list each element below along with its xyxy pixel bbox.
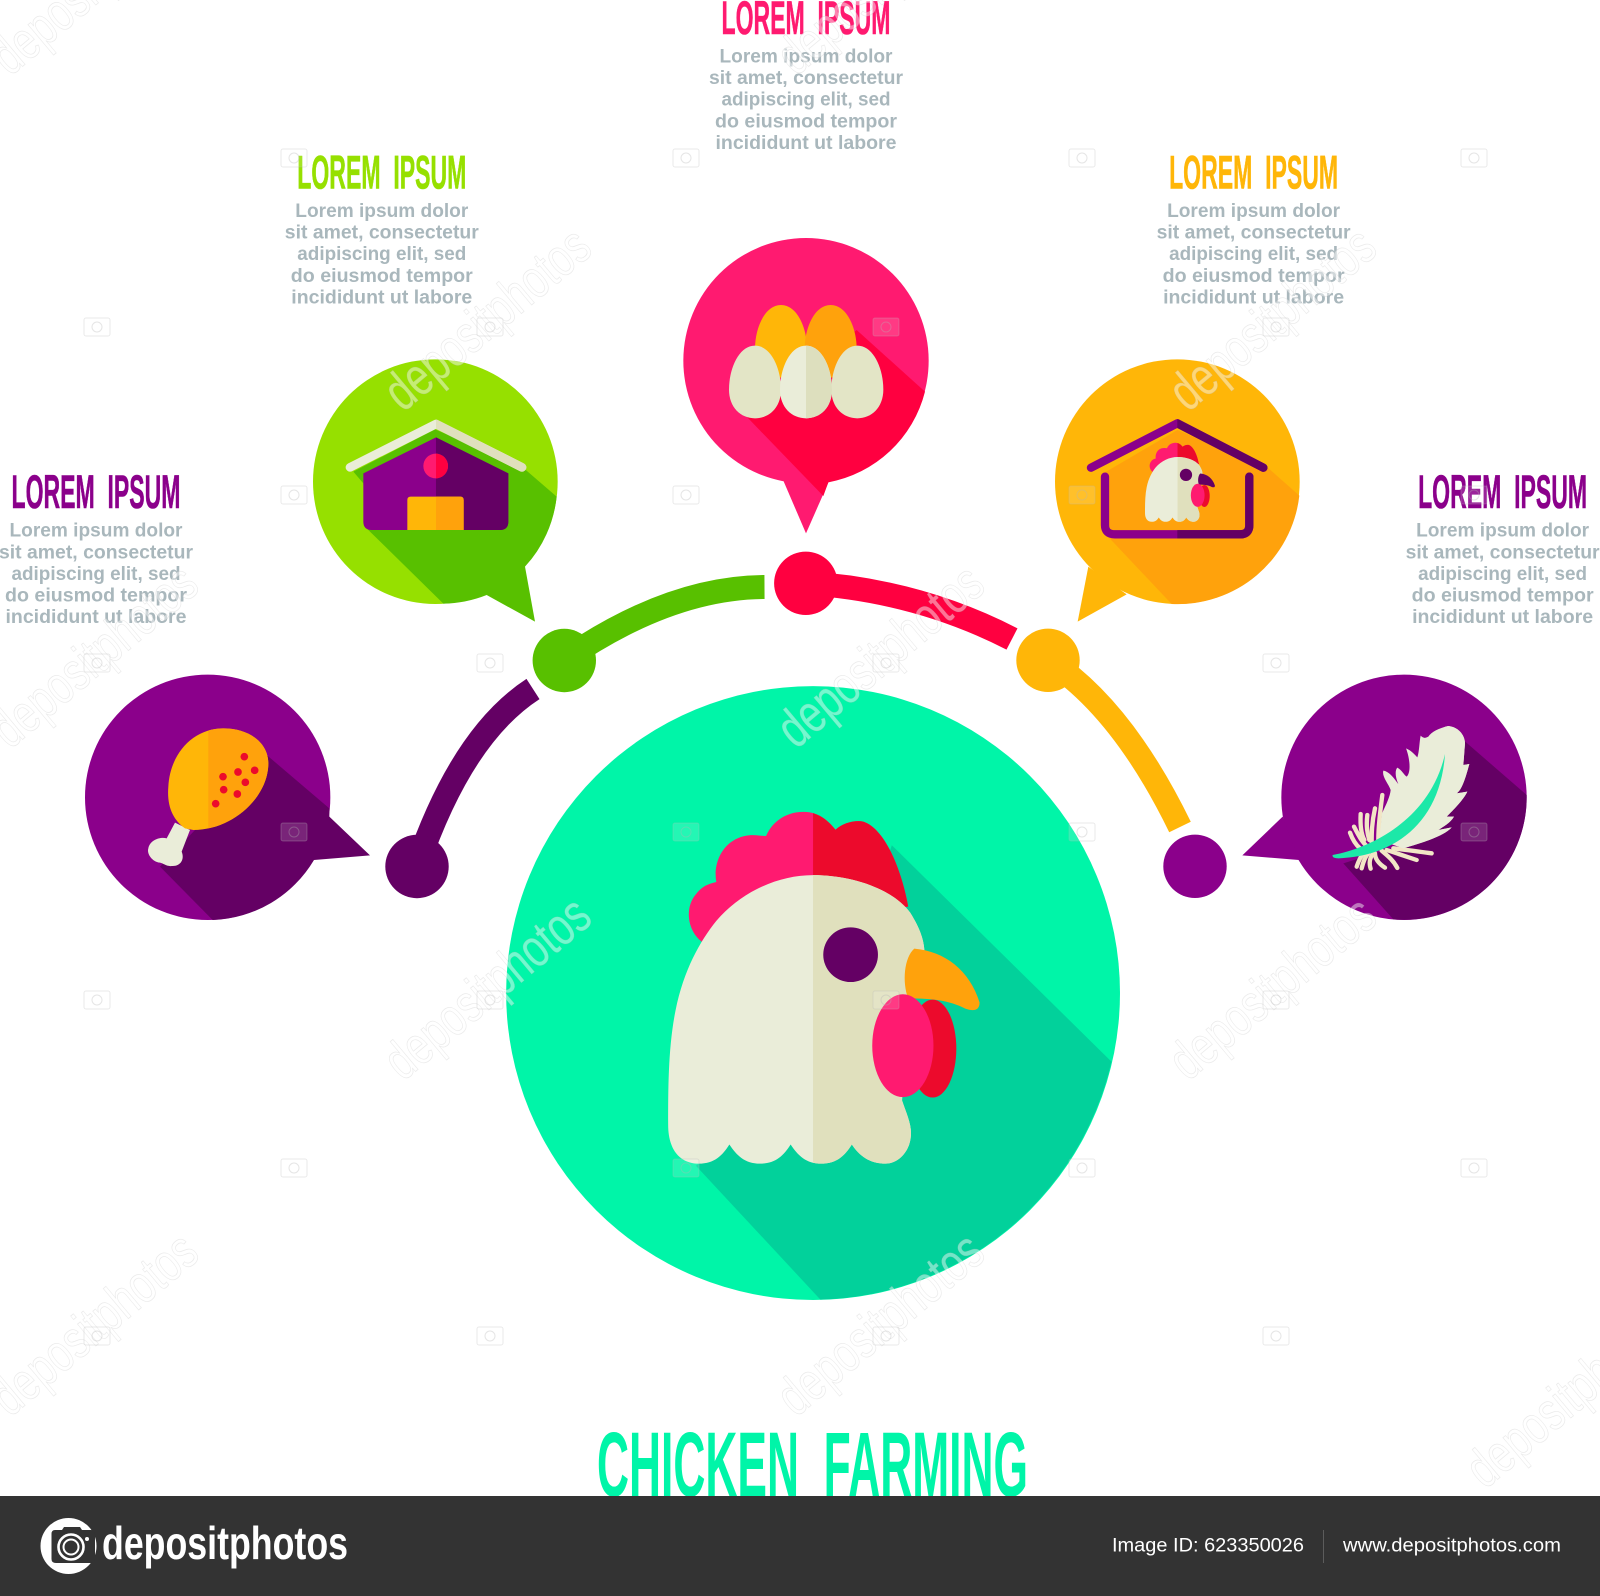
text block: left purple item	[0, 465, 193, 628]
body text: incididunt ut labore	[1163, 286, 1344, 308]
body text: adipiscing elit, sed	[12, 563, 180, 585]
image id: Image ID: 623350026	[1112, 1535, 1304, 1557]
body text: do eiusmod tempor	[1163, 265, 1345, 287]
body text: sit amet, consectetur	[709, 67, 903, 89]
arc: green	[564, 587, 764, 660]
body text	[709, 46, 903, 154]
watermark: depositphotos	[765, 1221, 995, 1427]
icon: chicken drumstick	[148, 728, 268, 866]
body text: sit amet, consectetur	[285, 222, 479, 244]
body text	[285, 200, 479, 308]
watermark: depositphotos	[1157, 216, 1387, 422]
website url: www.depositphotos.com	[1342, 1535, 1561, 1557]
text block: green item	[285, 145, 479, 308]
text block: left purple item: LOREM IPSUM	[12, 465, 180, 518]
speech bubble: feather	[1242, 675, 1527, 920]
icon: hen in coop	[1091, 423, 1263, 534]
body text: Lorem ipsum dolor	[10, 520, 183, 542]
body text: Lorem ipsum dolor	[720, 46, 893, 68]
body text: adipiscing elit, sed	[1418, 563, 1587, 585]
watermark: depositphotos	[765, 553, 995, 759]
body text: do eiusmod tempor	[5, 584, 187, 606]
body text: do eiusmod tempor	[291, 265, 473, 287]
speech bubble: drumstick	[85, 675, 370, 920]
node: green	[533, 629, 596, 692]
body text: incididunt ut labore	[716, 132, 897, 154]
speech bubble: farm house	[313, 359, 558, 622]
body text: Lorem ipsum dolor	[1167, 200, 1340, 222]
body text: sit amet, consectetur	[1157, 222, 1351, 244]
body text: do eiusmod tempor	[715, 110, 897, 132]
icon: eggs	[729, 305, 883, 418]
watermark: depositphotos	[372, 216, 602, 422]
body text	[1406, 520, 1600, 628]
connector arc with nodes	[385, 552, 1227, 898]
icon: feather	[1333, 726, 1469, 869]
node: left purple	[385, 835, 449, 898]
body text	[0, 520, 193, 628]
body text: sit amet, consectetur	[1406, 541, 1600, 563]
body text: adipiscing elit, sed	[1169, 243, 1338, 265]
speech bubble: hen house	[1055, 359, 1300, 622]
text block: pink top item	[709, 0, 903, 154]
text block: orange item	[1157, 145, 1351, 308]
text: CHICKEN FARMING	[597, 1414, 1028, 1516]
text block: right purple item	[1406, 465, 1600, 628]
body text: incididunt ut labore	[1412, 606, 1593, 628]
body text: adipiscing elit, sed	[722, 89, 890, 111]
body text: incididunt ut labore	[291, 286, 472, 308]
main circle with rooster head	[506, 686, 1120, 1300]
watermark: depositphotos	[372, 885, 602, 1091]
body text	[1157, 200, 1351, 308]
body text: incididunt ut labore	[6, 606, 187, 628]
node: right purple	[1163, 835, 1227, 898]
body text: sit amet, consectetur	[0, 541, 193, 563]
footer bar	[0, 1496, 1600, 1596]
arc: orange	[1048, 660, 1180, 827]
logo icon: camera	[40, 1518, 96, 1574]
text block: green item: LOREM IPSUM	[297, 145, 466, 198]
body text: Lorem ipsum dolor	[295, 200, 469, 222]
arc: purple	[417, 689, 533, 866]
node: red	[774, 552, 838, 615]
arc: red	[805, 583, 1012, 639]
divider	[1323, 1530, 1324, 1563]
watermark: depositphotos	[1157, 885, 1387, 1091]
body text: adipiscing elit, sed	[297, 243, 466, 265]
body text: Lorem ipsum dolor	[1416, 520, 1589, 542]
node: orange	[1016, 629, 1080, 692]
icon: barn	[350, 424, 522, 530]
logo wordmark: depositphotos	[102, 1517, 348, 1569]
icon: rooster head	[668, 812, 980, 1164]
speech bubble: eggs	[683, 238, 929, 533]
text block: orange item: LOREM IPSUM	[1169, 145, 1338, 198]
body text: do eiusmod tempor	[1412, 584, 1594, 606]
